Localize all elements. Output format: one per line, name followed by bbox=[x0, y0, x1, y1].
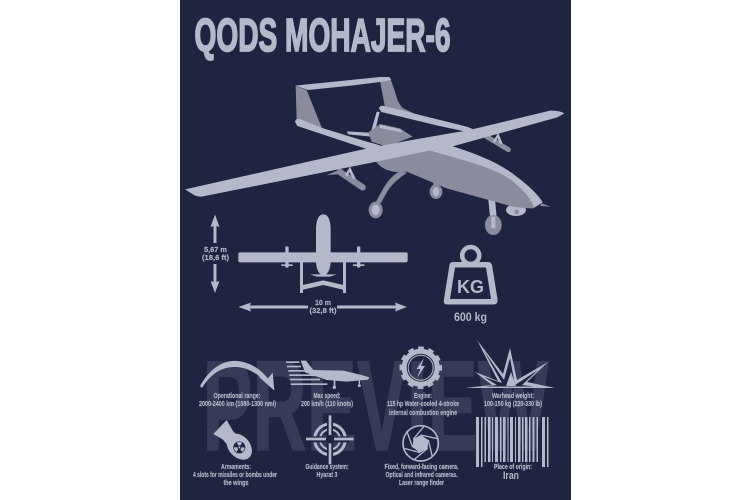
width label: 10 m bbox=[315, 298, 331, 307]
camera text bbox=[384, 462, 458, 487]
armaments text: the wings bbox=[224, 478, 248, 487]
warhead text: Warhead weight: bbox=[492, 391, 534, 400]
icon: range arc bbox=[200, 361, 274, 391]
near missile bbox=[327, 167, 363, 187]
propeller bbox=[347, 112, 380, 137]
height label: (18,6 ft) bbox=[202, 253, 229, 262]
speed text: Max speed: bbox=[314, 391, 340, 400]
near boom bbox=[295, 119, 394, 155]
main gear strut and wheel bbox=[369, 171, 407, 218]
icon: crosshair bbox=[306, 415, 354, 464]
nose gear bbox=[485, 200, 502, 235]
height label: 5,67 m bbox=[204, 245, 227, 254]
armaments text bbox=[193, 462, 277, 487]
height label bbox=[202, 245, 229, 262]
width arrow bbox=[238, 302, 407, 312]
range text: Operational range: bbox=[214, 391, 260, 400]
drone perspective illustration bbox=[185, 77, 564, 235]
icon: explosion bbox=[465, 340, 555, 388]
height arrow bbox=[210, 214, 220, 293]
guidance text: Guidance system: bbox=[306, 462, 348, 471]
icon: weight bbox=[444, 247, 498, 304]
range text bbox=[199, 391, 276, 408]
icon: speed plane bbox=[286, 361, 369, 389]
guidance text: Hyarat 3 bbox=[316, 470, 338, 479]
guidance text bbox=[306, 462, 348, 479]
far wheel bbox=[430, 182, 442, 199]
weight label: 600 kg bbox=[454, 310, 487, 324]
engine text: internal combustion engine bbox=[389, 408, 457, 417]
armaments text: 4 slots for missiles or bombs under bbox=[193, 470, 277, 479]
armaments text: Armaments: bbox=[221, 462, 251, 471]
icon: weight: KG bbox=[457, 276, 484, 297]
icon: bomb bbox=[213, 420, 257, 465]
background panel bbox=[180, 0, 571, 500]
far missile bbox=[487, 133, 508, 150]
fuselage bbox=[376, 151, 543, 208]
icon: camera aperture bbox=[403, 426, 438, 461]
engine text: 115 hp Water-cooled 4-stroke bbox=[387, 399, 459, 408]
width label bbox=[310, 298, 337, 315]
range text: 2000-2400 km (1080-1300 nmi) bbox=[199, 399, 276, 408]
engine text: Engine: bbox=[414, 391, 432, 400]
camera text: Optical and infrared cameras. bbox=[386, 470, 458, 479]
front view drone bbox=[238, 214, 408, 293]
main wing bbox=[185, 111, 564, 197]
origin text: Iran bbox=[503, 470, 519, 482]
camera text: Laser range finder bbox=[399, 478, 444, 487]
speed text: 200 km/h (110 knots) bbox=[301, 399, 353, 408]
camera text: Fixed, forward-facing camera. bbox=[384, 462, 458, 471]
nose sensor bbox=[506, 204, 526, 216]
speed text bbox=[301, 391, 353, 408]
icon: engine gear bbox=[399, 346, 442, 389]
tail stabilizer and fins bbox=[295, 77, 417, 129]
origin text bbox=[494, 462, 532, 482]
title: QODS MOHAJER-6 bbox=[194, 9, 450, 61]
warhead text: 100-150 kg (220-330 lb) bbox=[484, 399, 542, 408]
width label: (32,8 ft) bbox=[310, 306, 337, 315]
warhead text bbox=[484, 391, 542, 408]
origin text: Place of origin: bbox=[494, 462, 532, 471]
far boom bbox=[379, 106, 478, 134]
engine nacelle bbox=[368, 124, 413, 147]
icon: barcode bbox=[476, 417, 548, 467]
engine text bbox=[387, 391, 459, 417]
